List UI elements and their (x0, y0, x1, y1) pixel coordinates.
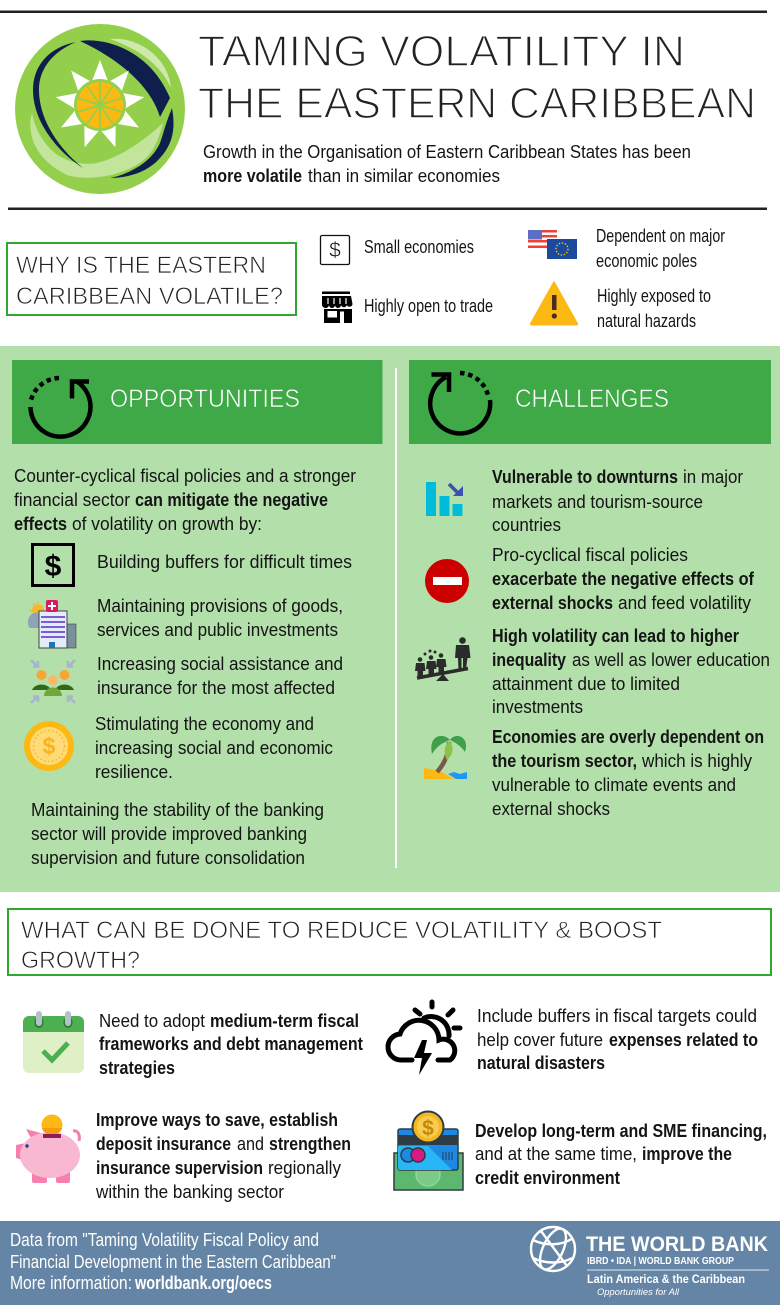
text: building buffers: Building buffers for difficult times (97, 552, 352, 572)
icon: calendar check (23, 1011, 84, 1073)
text: data source: Financial Development in the Eastern Caribbean" (10, 1252, 336, 1272)
icon: hospital (28, 600, 76, 648)
panel: challenges heading: CHALLENGES (515, 385, 669, 413)
icon: inequality seesaw (415, 637, 470, 681)
text: long-term SME financing: and at the same time, (475, 1144, 637, 1164)
text: high volatility: investments (492, 697, 583, 717)
icon: dollar frame (32, 544, 74, 586)
text: highly open to trade: Highly open to trade (364, 296, 493, 316)
panel: why is the eastern caribbean volatile (7, 243, 296, 315)
text: high volatility: High volatility can lead to higher (492, 626, 739, 646)
text: economies dependent on tourism (492, 727, 764, 819)
text: banking stability: Maintaining the stability of the banking (31, 800, 324, 820)
panel: opportunities and challenges background (0, 346, 780, 892)
subtitle (203, 142, 691, 186)
subtitle: more volatile (203, 166, 302, 186)
panel: opportunities heading: OPPORTUNITIES (110, 385, 300, 413)
text: dependent on major economic poles (596, 226, 725, 271)
text: pro-cyclical fiscal policies (492, 545, 755, 613)
text: medium-term fiscal frameworks (99, 1011, 363, 1078)
text: improve ways to save: Improve ways to save, establish (96, 1110, 338, 1130)
panel: challenges heading (409, 360, 771, 444)
text: vulnerable to downturns: Vulnerable to downturns (492, 467, 678, 487)
text: improve ways to save: deposit insurance (96, 1134, 231, 1154)
text: buffers in fiscal targets: Include buffers in fiscal targets could (477, 1006, 757, 1026)
panel: why is the eastern caribbean volatile: WHY IS THE EASTERN (16, 252, 266, 279)
text: stimulating the economy: Stimulating the economy and (95, 714, 314, 734)
text: maintaining provisions: Maintaining provisions of goods, (97, 596, 343, 616)
text: increasing social assistance (97, 654, 343, 698)
icon: globe (531, 1225, 575, 1273)
text: increasing social assistance: Increasing social assistance and (97, 654, 343, 674)
text: high volatility: as well as lower education (572, 650, 770, 670)
text: data source: Data from "Taming Volatility Fiscal Policy and (10, 1230, 319, 1250)
text: dependent on major economic poles: economic poles (596, 251, 697, 271)
text: improve ways to save: strengthen (269, 1134, 351, 1154)
text: banking stability: sector will provide improved banking (31, 824, 307, 844)
text: vulnerable to downturns: in major (683, 467, 743, 487)
text: vulnerable to downturns: markets and tourism-source (492, 492, 703, 512)
text: banking stability: supervision and future consolidation (31, 848, 305, 868)
text: buffers in fiscal targets: expenses related to (609, 1030, 758, 1050)
text: pro-cyclical fiscal policies: Pro-cyclical fiscal policies (492, 545, 688, 565)
text: high volatility: attainment due to limited (492, 674, 680, 694)
text: improve ways to save: and (237, 1134, 264, 1154)
text: improve ways to save: within the banking sector (95, 1182, 284, 1202)
text: opportunities intro: financial sector (14, 490, 130, 510)
icon: world bank logo (531, 1225, 769, 1298)
icon: falling bar chart (426, 482, 463, 516)
text: long-term SME financing: improve the (642, 1144, 732, 1164)
text: buffers in fiscal targets (477, 1006, 758, 1073)
text: medium-term fiscal frameworks: Need to adopt (99, 1011, 205, 1031)
title (198, 27, 756, 128)
text: highly exposed to natural hazards: natural hazards (597, 311, 696, 331)
text: banking stability (31, 800, 324, 868)
icon: warning triangle (530, 282, 578, 325)
text: opportunities intro: Counter-cyclical fiscal policies and a stronger (14, 466, 356, 486)
text: data source: More information: (10, 1273, 132, 1293)
text: medium-term fiscal frameworks: strategies (99, 1058, 175, 1078)
text: vulnerable to downturns (492, 467, 743, 535)
icon: world bank logo: THE WORLD BANK (586, 1233, 768, 1256)
icon: dollar box (320, 236, 350, 264)
panel: what can be done heading: GROWTH? (21, 947, 140, 974)
title: TAMING VOLATILITY IN (198, 27, 685, 76)
icon: world bank logo: Latin America & the Caribbean (587, 1272, 745, 1286)
icon: opportunities arrow (30, 378, 90, 437)
text: dependent on major economic poles: Dependent on major (596, 226, 725, 246)
icon: storm cloud and sun (388, 1002, 460, 1075)
text: high volatility (492, 626, 770, 717)
subtitle: than in similar economies (308, 166, 500, 186)
text: economies dependent on tourism: vulnerable to climate events and (492, 775, 736, 795)
panel: opportunities heading (12, 360, 382, 444)
icon: dollar frame: $ (45, 550, 62, 583)
text: highly exposed to natural hazards: Highly exposed to (597, 286, 711, 306)
icon: piggy bank (16, 1114, 80, 1183)
text: pro-cyclical fiscal policies: exacerbate the negative effects of (492, 569, 755, 589)
icon: US and EU flags (528, 230, 577, 259)
text: economies dependent on tourism: external shocks (492, 799, 610, 819)
icon: world bank logo: IBRD • IDA | WORLD BANK GROUP (587, 1255, 734, 1267)
text: improve ways to save: regionally (268, 1158, 342, 1178)
icon: gold coin (24, 721, 74, 771)
icon: money, card and coin: $ (422, 1117, 434, 1140)
icon: OECS logo (15, 24, 185, 194)
text: economies dependent on tourism: the tourism sector, (492, 751, 637, 771)
text: medium-term fiscal frameworks: medium-term fiscal (210, 1011, 359, 1031)
text: opportunities intro: effects (14, 514, 67, 534)
text: long-term SME financing: credit environment (475, 1168, 620, 1188)
icon: dollar box: $ (329, 239, 341, 262)
text: maintaining provisions: services and public investments (97, 620, 338, 640)
text: data source (10, 1230, 336, 1293)
icon: challenges arrow (430, 373, 490, 433)
icon: money, card and coin (394, 1112, 463, 1190)
title: THE EASTERN CARIBBEAN (198, 79, 756, 128)
icon: palm tree (424, 736, 467, 779)
text: long-term SME financing (475, 1121, 767, 1188)
icon: store (322, 292, 352, 323)
text: highly exposed to natural hazards (597, 286, 711, 331)
text: high volatility: inequality (492, 650, 567, 670)
icon: world bank logo: Opportunities for All (597, 1287, 680, 1298)
text: small economies: Small economies (364, 237, 474, 257)
text: economies dependent on tourism: which is highly (641, 751, 753, 771)
icon: gold coin: $ (43, 733, 56, 759)
icon: no entry (425, 559, 469, 603)
text: improve ways to save (95, 1110, 351, 1202)
text: buffers in fiscal targets: natural disasters (477, 1053, 605, 1073)
text: maintaining provisions (97, 596, 343, 640)
text: vulnerable to downturns: countries (492, 515, 561, 535)
text: stimulating the economy: resilience. (95, 762, 173, 782)
text: increasing social assistance: insurance for the most affected (97, 678, 335, 698)
text: stimulating the economy: increasing social and economic (95, 738, 333, 758)
panel: what can be done heading (8, 909, 771, 975)
text: opportunities intro: can mitigate the negative (135, 490, 328, 510)
text: opportunities intro: of volatility on growth by: (72, 514, 262, 534)
text: pro-cyclical fiscal policies: external shocks (492, 593, 613, 613)
panel: what can be done heading: WHAT CAN BE DONE TO REDUCE VOLATILITY & BOOST (21, 917, 662, 944)
text: improve ways to save: insurance supervision (96, 1158, 263, 1178)
panel: why is the eastern caribbean volatile: CARIBBEAN VOLATILE? (16, 283, 283, 310)
subtitle: Growth in the Organisation of Eastern Caribbean States has been (203, 142, 691, 162)
text: pro-cyclical fiscal policies: and feed volatility (618, 593, 752, 613)
text: stimulating the economy (95, 714, 333, 782)
icon: people gathering (31, 660, 75, 703)
text: medium-term fiscal frameworks: frameworks and debt management (99, 1034, 363, 1054)
text: data source: worldbank.org/oecs (134, 1273, 272, 1293)
text: buffers in fiscal targets: help cover future (477, 1030, 603, 1050)
panel: footer (0, 1221, 780, 1305)
text: opportunities intro (14, 466, 356, 534)
